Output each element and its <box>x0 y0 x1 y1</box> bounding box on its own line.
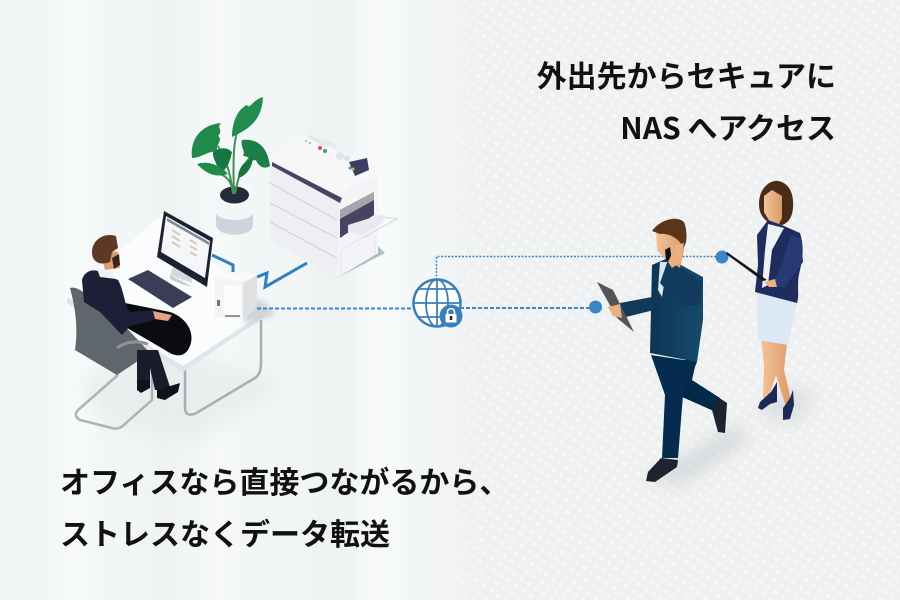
connection dot: woman <box>716 250 728 264</box>
man walking with tablet <box>597 219 750 485</box>
printer <box>270 135 397 278</box>
man at desk <box>70 235 192 429</box>
cables <box>212 255 307 287</box>
skirt <box>757 290 797 345</box>
woman with tablet <box>726 181 815 422</box>
hair <box>652 219 687 248</box>
front leg <box>651 355 697 458</box>
leaves <box>192 123 221 158</box>
legs <box>761 338 791 404</box>
tablet <box>597 282 634 332</box>
phone and hand <box>665 247 672 262</box>
jacket <box>755 220 803 303</box>
front shoe <box>646 458 678 482</box>
head <box>656 228 684 268</box>
dotted connection: globe to woman <box>436 256 718 280</box>
shadow <box>755 385 815 422</box>
floor shadow <box>80 345 285 440</box>
control panel <box>318 146 322 150</box>
pot <box>216 183 253 235</box>
title: remote access: 外出先からセキュアに <box>537 52 836 96</box>
shoes <box>137 380 180 400</box>
globe with lock icon <box>414 280 462 328</box>
back leg <box>670 355 720 412</box>
hair <box>759 181 793 225</box>
plant <box>192 97 270 235</box>
hand <box>608 304 622 318</box>
legs <box>137 350 171 390</box>
office scene <box>67 97 397 440</box>
neck and face <box>764 190 782 226</box>
arm to phone <box>660 260 703 305</box>
desk <box>67 213 263 415</box>
tablet <box>726 252 767 281</box>
stems <box>214 118 256 194</box>
hand <box>153 311 172 321</box>
head <box>100 250 120 270</box>
torso <box>82 270 155 335</box>
title: remote access line 2: NAS へアクセス <box>620 104 836 148</box>
lap <box>122 303 192 355</box>
caption: office line 1: オフィスなら直接つながるから、 <box>60 458 509 502</box>
keyboard <box>128 270 192 308</box>
connection dot: man <box>589 300 602 314</box>
NAS <box>215 272 275 324</box>
caption: office line 2: ストレスなくデータ転送 <box>60 510 390 554</box>
jacket <box>650 258 703 362</box>
dashed connection: NAS to globe to man <box>257 307 590 310</box>
shoes <box>758 382 794 420</box>
chair <box>70 288 152 429</box>
monitor <box>157 211 213 287</box>
back shoe <box>712 397 727 433</box>
arm to tablet <box>620 297 654 318</box>
collar <box>97 269 116 279</box>
shadow <box>645 425 750 485</box>
hand <box>764 279 777 287</box>
